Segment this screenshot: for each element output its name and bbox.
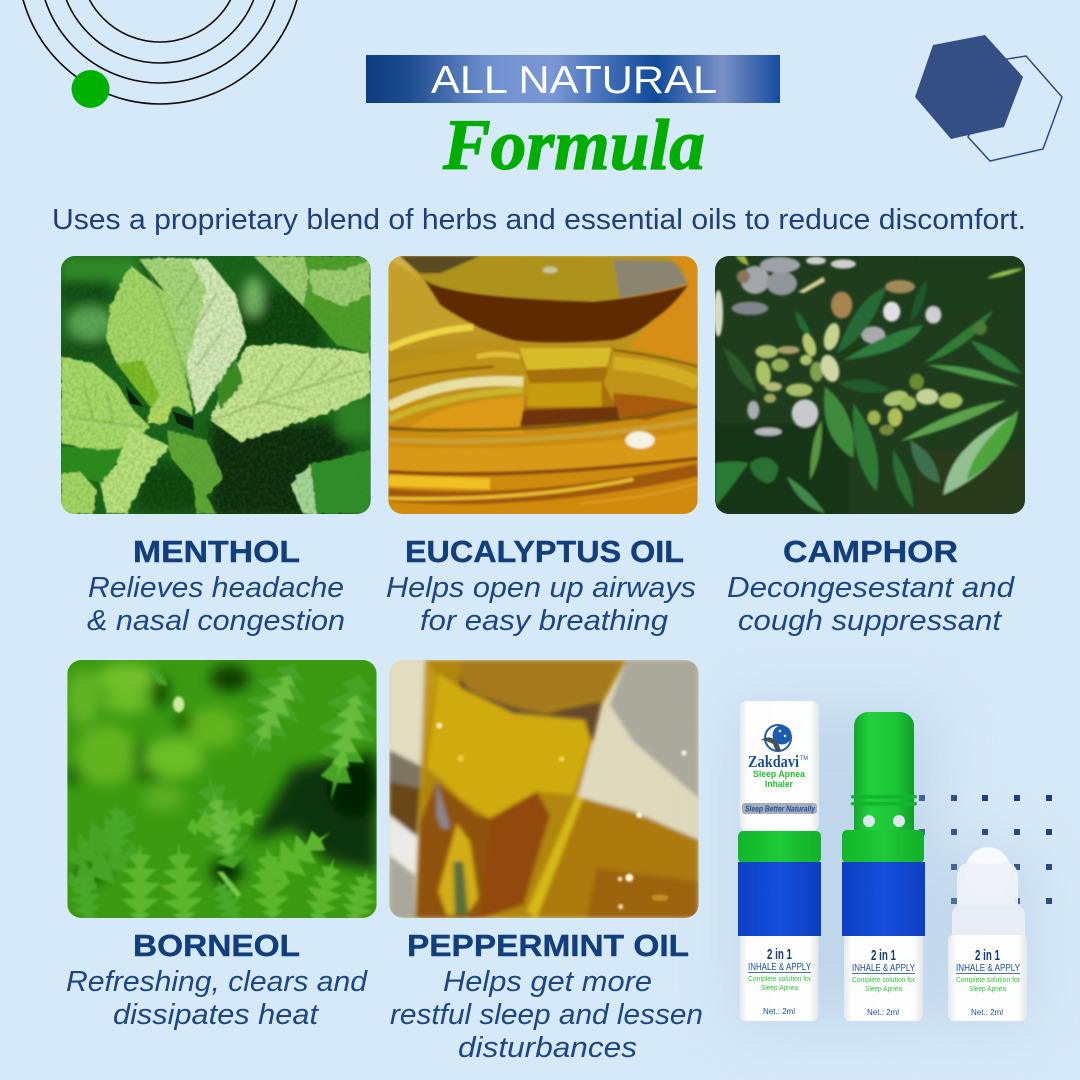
panel: camphor — [714, 256, 1025, 637]
title: Formula: Formula — [442, 105, 705, 185]
description: eucalyptus oil: Helps open up airways — [386, 572, 696, 604]
product: inhaler with cap off: INHALE & APPLY — [852, 963, 915, 974]
product shadow — [735, 705, 1030, 1025]
description: menthol — [87, 572, 345, 637]
green dot — [72, 70, 110, 108]
description: peppermint oil — [390, 966, 703, 1064]
photo: golden oil and spoon — [388, 256, 698, 514]
panel: menthol — [61, 256, 373, 637]
label: borneol: BORNEOL — [133, 928, 300, 963]
description: menthol: Relieves headache — [88, 572, 344, 604]
product: inhaler with cap on: INHALE & APPLY — [748, 962, 811, 973]
heading banner — [366, 55, 780, 103]
panel: eucalyptus oil — [386, 256, 698, 637]
product: inhaler with cap on: Sleep Better Naturally — [745, 804, 815, 814]
product: inhaler with cap off: 2 in 1 — [871, 947, 896, 964]
product: roll-on applicator: INHALE & APPLY — [956, 963, 1020, 974]
product: inhaler with cap on: Complete solution for — [748, 976, 812, 983]
description: peppermint oil: disturbances — [458, 1032, 637, 1064]
brand name: TM — [800, 756, 808, 762]
product: roll-on applicator: 2 in 1 — [975, 947, 1000, 964]
concentric arcs decoration — [18, 0, 302, 104]
panel: peppermint oil — [389, 660, 703, 1064]
photo: pouring oil — [389, 660, 699, 918]
description: menthol: & nasal congestion — [87, 605, 345, 637]
description: camphor: Decongesestant and — [727, 572, 1015, 604]
product: inhaler with cap on: Net.: 2ml — [763, 1006, 795, 1016]
product: inhaler with cap on — [738, 701, 821, 1021]
dot grid decoration — [919, 795, 1052, 904]
label: eucalyptus oil: EUCALYPTUS OIL — [405, 534, 684, 569]
photo: camphor branch — [714, 256, 1025, 514]
description: eucalyptus oil — [386, 572, 696, 637]
product: inhaler with cap on: 2 in 1 — [767, 946, 792, 963]
heading banner: ALL NATURAL — [431, 59, 717, 102]
description: peppermint oil: Helps get more — [443, 966, 652, 998]
product: inhaler with cap off: Sleep Apnea — [865, 986, 902, 993]
photo: menthol leaves — [61, 256, 373, 517]
description: borneol: Refreshing, clears and — [66, 966, 368, 998]
description: peppermint oil: restful sleep and lessen — [390, 999, 703, 1031]
photo: borneol fern foliage — [67, 660, 377, 918]
product: inhaler with cap on: Inhaler — [765, 779, 793, 790]
description: camphor — [727, 572, 1015, 637]
description: borneol: dissipates heat — [113, 999, 320, 1031]
product: inhaler with cap on: Sleep Apnea — [761, 985, 798, 992]
description: eucalyptus oil: for easy breathing — [420, 605, 668, 637]
product: inhaler with cap off: Complete solution for — [852, 977, 916, 984]
product: inhaler with cap off: Net.: 2ml — [867, 1007, 899, 1017]
product: roll-on applicator: Sleep Apnea — [969, 986, 1006, 993]
description: camphor: cough suppressant — [738, 605, 1003, 637]
product: roll-on applicator: Net.: 2ml — [971, 1007, 1003, 1017]
description: borneol — [66, 966, 368, 1031]
product: roll-on applicator — [948, 847, 1027, 1021]
label: menthol: MENTHOL — [133, 534, 300, 569]
label: camphor: CAMPHOR — [783, 534, 958, 569]
icon: brand logo — [761, 725, 792, 752]
subtitle: Uses a proprietary blend of herbs and essential oils to reduce discomfort. — [52, 204, 1026, 236]
hexagon decoration — [915, 35, 1062, 161]
product: roll-on applicator: Complete solution for — [956, 977, 1021, 984]
brand name: Zakdavi — [748, 752, 799, 771]
label: peppermint oil: PEPPERMINT OIL — [407, 928, 689, 963]
product: inhaler with cap on: Sleep Apnea — [753, 769, 806, 780]
panel: borneol — [57, 653, 389, 1031]
product: inhaler with cap off — [842, 712, 925, 1021]
